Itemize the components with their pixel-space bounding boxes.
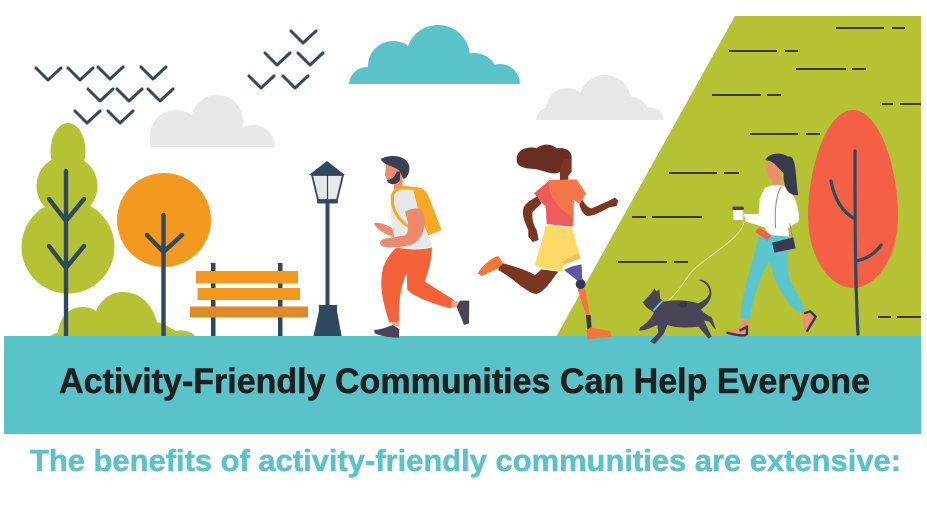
red tree (808, 110, 898, 334)
green tree (22, 123, 114, 335)
dog (639, 280, 716, 344)
orange tree (117, 173, 211, 335)
teal cloud (349, 25, 520, 84)
street lamp (309, 161, 345, 338)
green hill (556, 16, 921, 337)
grey cloud right (536, 75, 664, 120)
subtitle: The benefits of activity-friendly communities are extensive: (30, 443, 901, 478)
bush (50, 292, 196, 337)
ground band (4, 336, 921, 434)
bench (190, 263, 308, 337)
title: Activity-Friendly Communities Can Help Everyone (59, 362, 870, 401)
woman running with prosthetic leg (478, 145, 618, 339)
woman walking with coffee (668, 154, 816, 335)
birds (36, 31, 323, 123)
grey cloud left (150, 95, 275, 147)
man jogging with backpack (374, 156, 469, 338)
